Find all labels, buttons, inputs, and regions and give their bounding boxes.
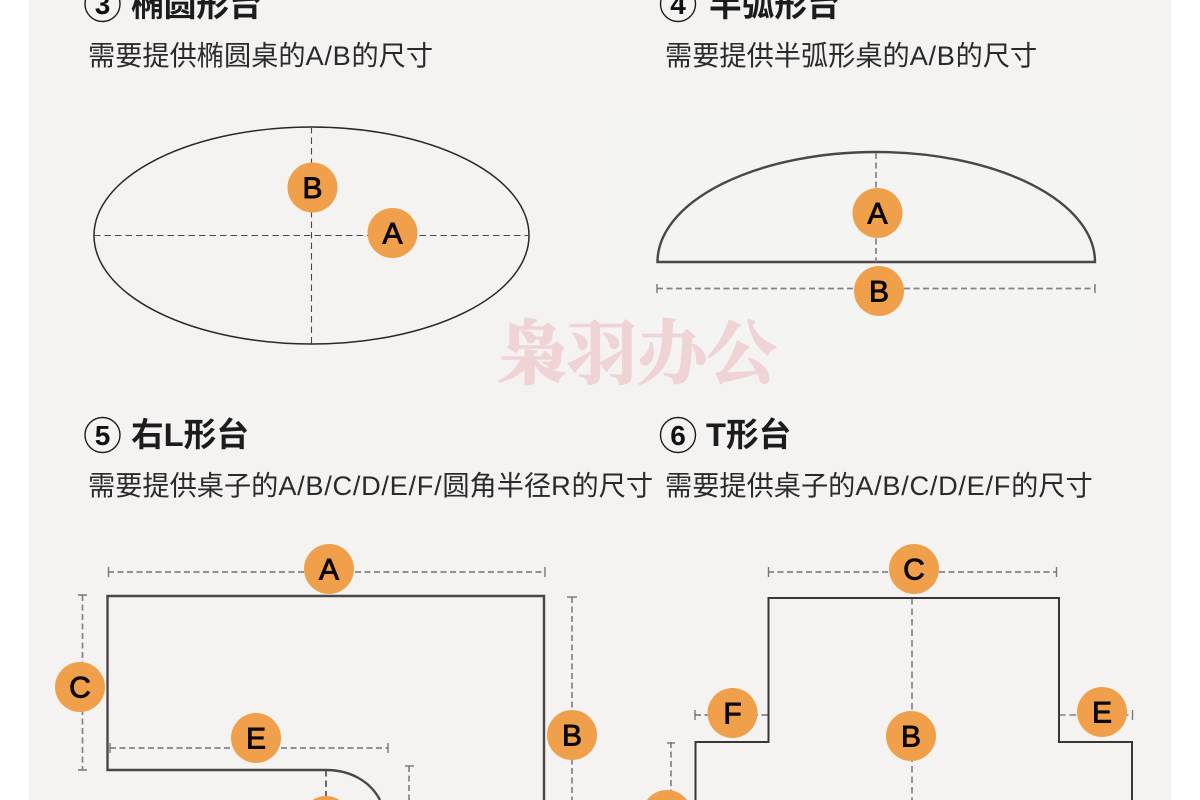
heading: T-shaped table: 6 [670, 420, 686, 451]
badge: A [852, 188, 902, 238]
badge: B: B [869, 276, 889, 308]
panel: semicircular table [606, 0, 1133, 350]
badge: A: A [319, 554, 339, 586]
text: right L-shaped table requirement: 需要提供桌子的A/B/C/D/E/F/圆角半径R的尺寸 [88, 470, 653, 501]
badge: cropped at frame edge [312, 796, 340, 800]
badge: B: B [562, 720, 582, 752]
badge: C: C [903, 554, 925, 586]
diagram: T-shaped table [647, 544, 1132, 800]
badge: B [854, 266, 904, 316]
panel: right L-shaped table [55, 416, 653, 800]
badge: F [708, 688, 758, 738]
badge: F: F [723, 698, 742, 730]
badge: C [889, 544, 939, 594]
badge: B: B [302, 172, 323, 205]
badge: A: A [867, 198, 888, 230]
diagram: semicircular table [657, 152, 1095, 316]
badge: A [304, 544, 354, 594]
text: T-shaped table requirement: 需要提供桌子的A/B/C/D/E/F的尺寸 [665, 470, 1093, 501]
badge: A: A [382, 218, 403, 250]
diagram backdrop [606, 115, 1133, 350]
badge: C: C [69, 672, 91, 704]
badge: B [886, 711, 936, 761]
badge: E [231, 713, 281, 763]
heading: right L-shaped table: 右L形台 [131, 416, 249, 453]
watermark: 枭羽办公 [497, 317, 777, 394]
badge: cropped at frame edge [647, 790, 687, 800]
badge: E [1077, 687, 1127, 737]
panel: T-shaped table [647, 416, 1132, 800]
badge: A [368, 208, 418, 258]
heading: T-shaped table [660, 416, 791, 453]
badge: B [547, 710, 597, 760]
diagram: oval table [94, 127, 529, 344]
panel: oval table [85, 0, 529, 344]
badge: C [55, 662, 105, 712]
badge: E: E [1092, 696, 1112, 730]
heading: right L-shaped table: 5 [95, 420, 110, 451]
heading: T-shaped table: T形台 [706, 416, 791, 453]
badge: B [288, 162, 338, 212]
text: oval table requirement: 需要提供椭圆桌的A/B的尺寸 [88, 40, 433, 71]
badge: B: B [901, 720, 921, 754]
text: semicircular table requirement: 需要提供半弧形桌的A/B的尺寸 [665, 40, 1037, 71]
diagram: right L-shaped table [55, 544, 597, 800]
badge: E: E [246, 722, 266, 756]
